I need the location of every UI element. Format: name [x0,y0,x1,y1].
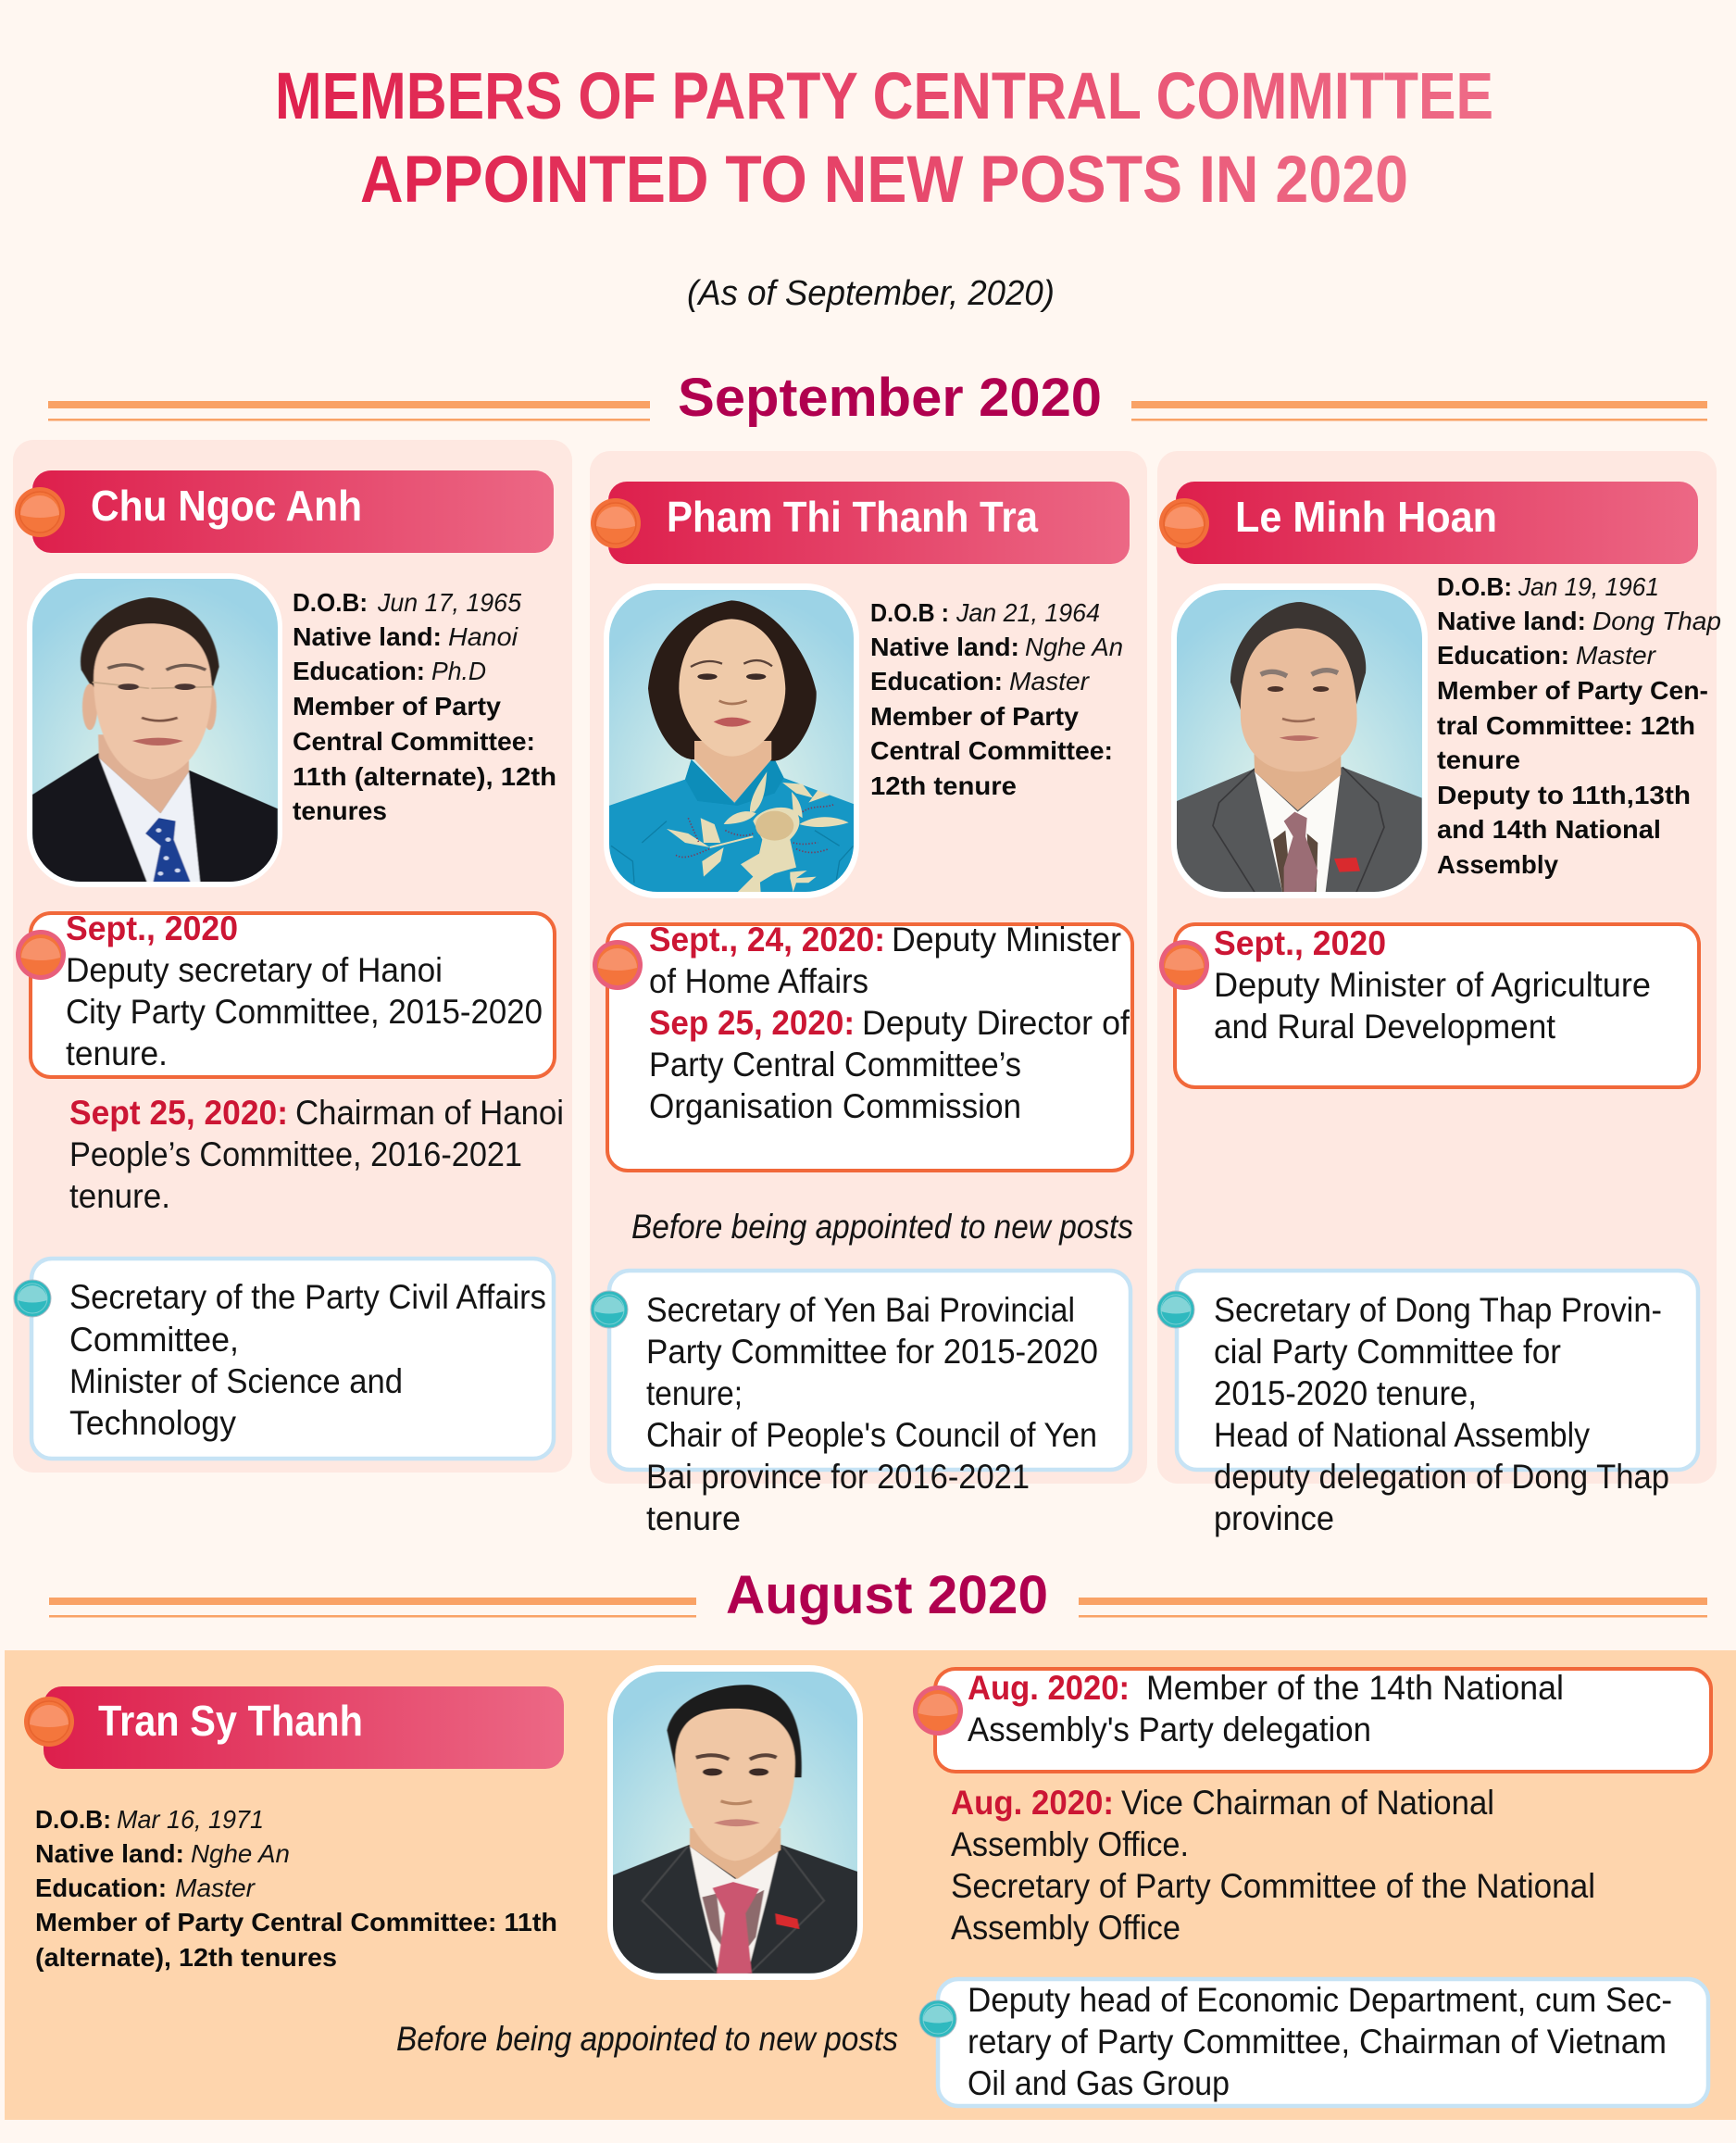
new post box: Deputy Director of [862,1004,1130,1042]
title: APPOINTED TO NEW POSTS IN 2020 [360,144,1408,217]
biography: Master [175,1874,256,1902]
biography: 12th tenure [870,771,1017,800]
biography: D.O.B: [35,1805,111,1834]
new post box: Assembly's Party delegation [968,1711,1371,1748]
second post text: Aug. 2020: [951,1784,1114,1822]
second post text: Chairman of Hanoi [295,1094,564,1132]
biography: D.O.B: [293,588,368,617]
biography: Mar 16, 1971 [117,1805,264,1834]
new post box [913,1669,1711,1772]
previous post box: tenure [646,1499,741,1537]
biography: Hanoi [448,622,518,651]
previous post box: Deputy head of Economic Department, cum Sec- [968,1981,1672,2019]
new post box: Sept., 2020 [66,909,238,947]
previous post box: cial Party Committee for [1214,1333,1561,1371]
biography: tenure [1437,746,1520,774]
biography [1437,572,1721,879]
previous post box: Chair of People's Council of Yen [646,1416,1097,1454]
biography: Native land: [1437,607,1586,635]
new post box: Party Central Committee’s [649,1046,1021,1084]
new post box [16,909,555,1077]
new post box: and Rural Development [1214,1008,1556,1046]
biography: Education: [35,1874,167,1902]
biography: D.O.B: [1437,572,1512,601]
biography: Central Committee: [293,727,535,756]
new post box: Organisation Commission [649,1087,1021,1125]
new post box: of Home Affairs [649,962,868,1000]
panel: Chu Ngoc Anh [13,440,572,1473]
second post text: Assembly Office [951,1909,1180,1947]
portrait [1171,583,1428,898]
section heading: August 2020: August 2020 [726,1565,1048,1625]
biography: Member of Party [870,702,1079,731]
second post text: tenure. [69,1177,170,1215]
panel: Le Minh Hoan [1157,451,1721,1537]
panel: Tran Sy Thanh [5,1650,1736,2120]
name banner: Chu Ngoc Anh [91,482,362,530]
new post box: Aug. 2020: [968,1669,1130,1707]
name banner: Pham Thi Thanh Tra [667,493,1038,541]
second post text: Assembly Office. [951,1825,1189,1863]
biography: Member of Party [293,692,501,721]
second post text [69,1094,564,1215]
biography: Native land: [870,633,1019,661]
second post text: Secretary of Party Committee of the National [951,1867,1595,1905]
caption: before being appointed: Before being appointed to new posts [396,2020,898,2058]
title: MEMBERS OF PARTY CENTRAL COMMITTEE [275,60,1493,133]
previous post box [14,1259,554,1459]
previous post box: 2015-2020 tenure, [1214,1374,1477,1412]
biography: Master [1009,667,1091,696]
new post box: Deputy secretary of Hanoi [66,951,443,989]
new post box: City Party Committee, 2015-2020 [66,993,543,1031]
previous post box [919,1979,1708,2106]
biography [35,1805,557,1972]
name banner [591,482,1130,564]
previous post box: Head of National Assembly [1214,1416,1590,1454]
biography: Jan 19, 1961 [1517,572,1659,601]
portrait [604,583,859,898]
portrait [27,573,282,887]
previous post box: Secretary of the Party Civil Affairs [69,1278,546,1316]
subtitle: (As of September, 2020) [687,274,1055,313]
name banner: Le Minh Hoan [1235,493,1497,541]
previous post box: retary of Party Committee, Chairman of Vietnam [968,2023,1667,2061]
new post box: Sept., 24, 2020: [649,921,885,959]
previous post box: deputy delegation of Dong Thap [1214,1458,1669,1496]
previous post box: Technology [69,1404,236,1442]
new post box: Deputy Minister [892,921,1121,959]
biography: Native land: [35,1839,184,1868]
biography: tral Committee: 12th [1437,711,1695,740]
biography: Native land: [293,622,442,651]
new post box: Sep 25, 2020: [649,1004,855,1042]
biography: Central Committee: [870,736,1113,765]
name banner [1159,482,1698,564]
biography: Dong Thap [1592,607,1721,635]
biography: Assembly [1437,850,1558,879]
biography: D.O.B : [870,598,949,627]
panel: Pham Thi Thanh Tra [590,451,1147,1537]
biography [870,598,1123,800]
biography: Jun 17, 1965 [377,588,521,617]
new post box: Sept., 2020 [1214,924,1386,962]
previous post box: Secretary of Yen Bai Provincial [646,1291,1075,1329]
new post box: Member of the 14th National [1146,1669,1564,1707]
title [275,60,1493,217]
previous post box [591,1271,1130,1537]
section heading: August 2020 [49,1565,1707,1625]
biography: Education: [293,657,425,685]
biography: Nghe An [191,1839,290,1868]
previous post box: Committee, [69,1321,239,1359]
new post box: Deputy Minister of Agriculture [1214,966,1651,1004]
biography: tenures [293,796,387,825]
previous post box: Party Committee for 2015-2020 [646,1333,1098,1371]
new post box: tenure. [66,1034,168,1072]
previous post box: tenure; [646,1374,743,1412]
previous post box: Bai province for 2016-2021 [646,1458,1030,1496]
biography: Education: [870,667,1003,696]
biography: Member of Party Cen- [1437,676,1708,705]
biography: Member of Party Central Committee: 11th [35,1908,557,1936]
biography: (alternate), 12th tenures [35,1943,337,1972]
biography: Nghe An [1025,633,1123,661]
section heading: September 2020: September 2020 [678,368,1102,428]
name banner [15,470,554,553]
biography: Education: [1437,641,1569,670]
previous post box: Secretary of Dong Thap Provin- [1214,1291,1662,1329]
new post box [593,921,1132,1171]
second post text [951,1784,1595,1947]
biography: Jan 21, 1964 [955,598,1100,627]
name banner [24,1686,564,1769]
previous post box: Minister of Science and [69,1362,403,1400]
name banner: Tran Sy Thanh [98,1697,363,1745]
second post text: People’s Committee, 2016-2021 [69,1135,522,1173]
section heading: September 2020 [48,368,1707,428]
biography: Master [1576,641,1657,670]
second post text: Vice Chairman of National [1121,1784,1494,1822]
biography: Ph.D [431,657,486,685]
biography: and 14th National [1437,815,1661,844]
caption: before being appointed: Before being appointed to new posts [631,1208,1133,1246]
biography [293,588,556,825]
new post box [1159,924,1699,1087]
second post text: Sept 25, 2020: [69,1094,288,1132]
previous post box [1157,1271,1698,1537]
biography: 11th (alternate), 12th [293,762,556,791]
previous post box: Oil and Gas Group [968,2064,1230,2102]
portrait [607,1665,863,1980]
biography: Deputy to 11th,13th [1437,781,1691,809]
previous post box: province [1214,1499,1334,1537]
